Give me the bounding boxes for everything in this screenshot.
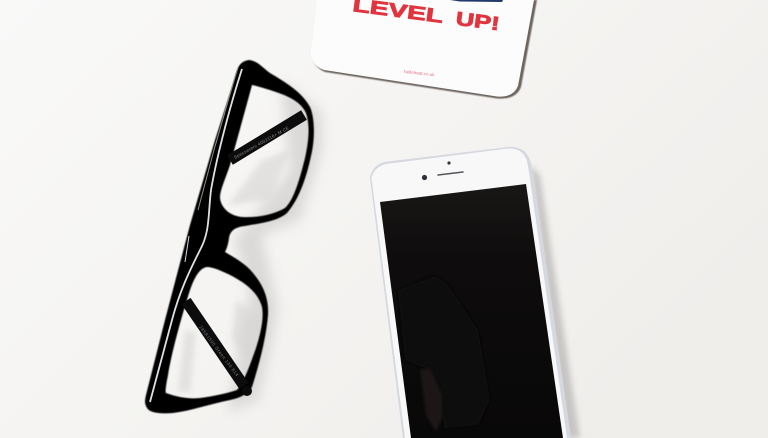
phone screen [380, 184, 563, 438]
coaster: Level Up [311, 0, 537, 99]
coaster small print: hellotreat.co.uk [404, 69, 436, 77]
upper temple print: Specsavers 4002116+ M CE [233, 125, 290, 160]
screen reflection: dark hand [398, 276, 490, 428]
glasses stripe: crossing highlight [185, 236, 189, 262]
phone [370, 147, 571, 438]
glasses lower temple arm [186, 301, 252, 396]
shadow: lens interior [178, 150, 290, 392]
glasses upper temple arm [230, 115, 304, 160]
glasses [145, 60, 314, 413]
phone front camera [422, 175, 427, 180]
coaster heading: UP! [454, 9, 501, 35]
phone body [370, 147, 571, 438]
coaster artwork edge [450, 0, 503, 2]
glasses frame [145, 60, 314, 413]
phone speaker [438, 172, 463, 175]
glasses stripe: left edge highlight [198, 70, 237, 210]
lower temple print: 285A1500 Green 134 814 [198, 325, 240, 378]
phone sensor [447, 161, 451, 165]
screen reflection: light patch [420, 368, 442, 432]
shadow: phone [530, 165, 580, 438]
shadow: glasses [228, 80, 322, 412]
glasses stripe: outer white edge [150, 69, 242, 402]
phone face [372, 148, 567, 438]
